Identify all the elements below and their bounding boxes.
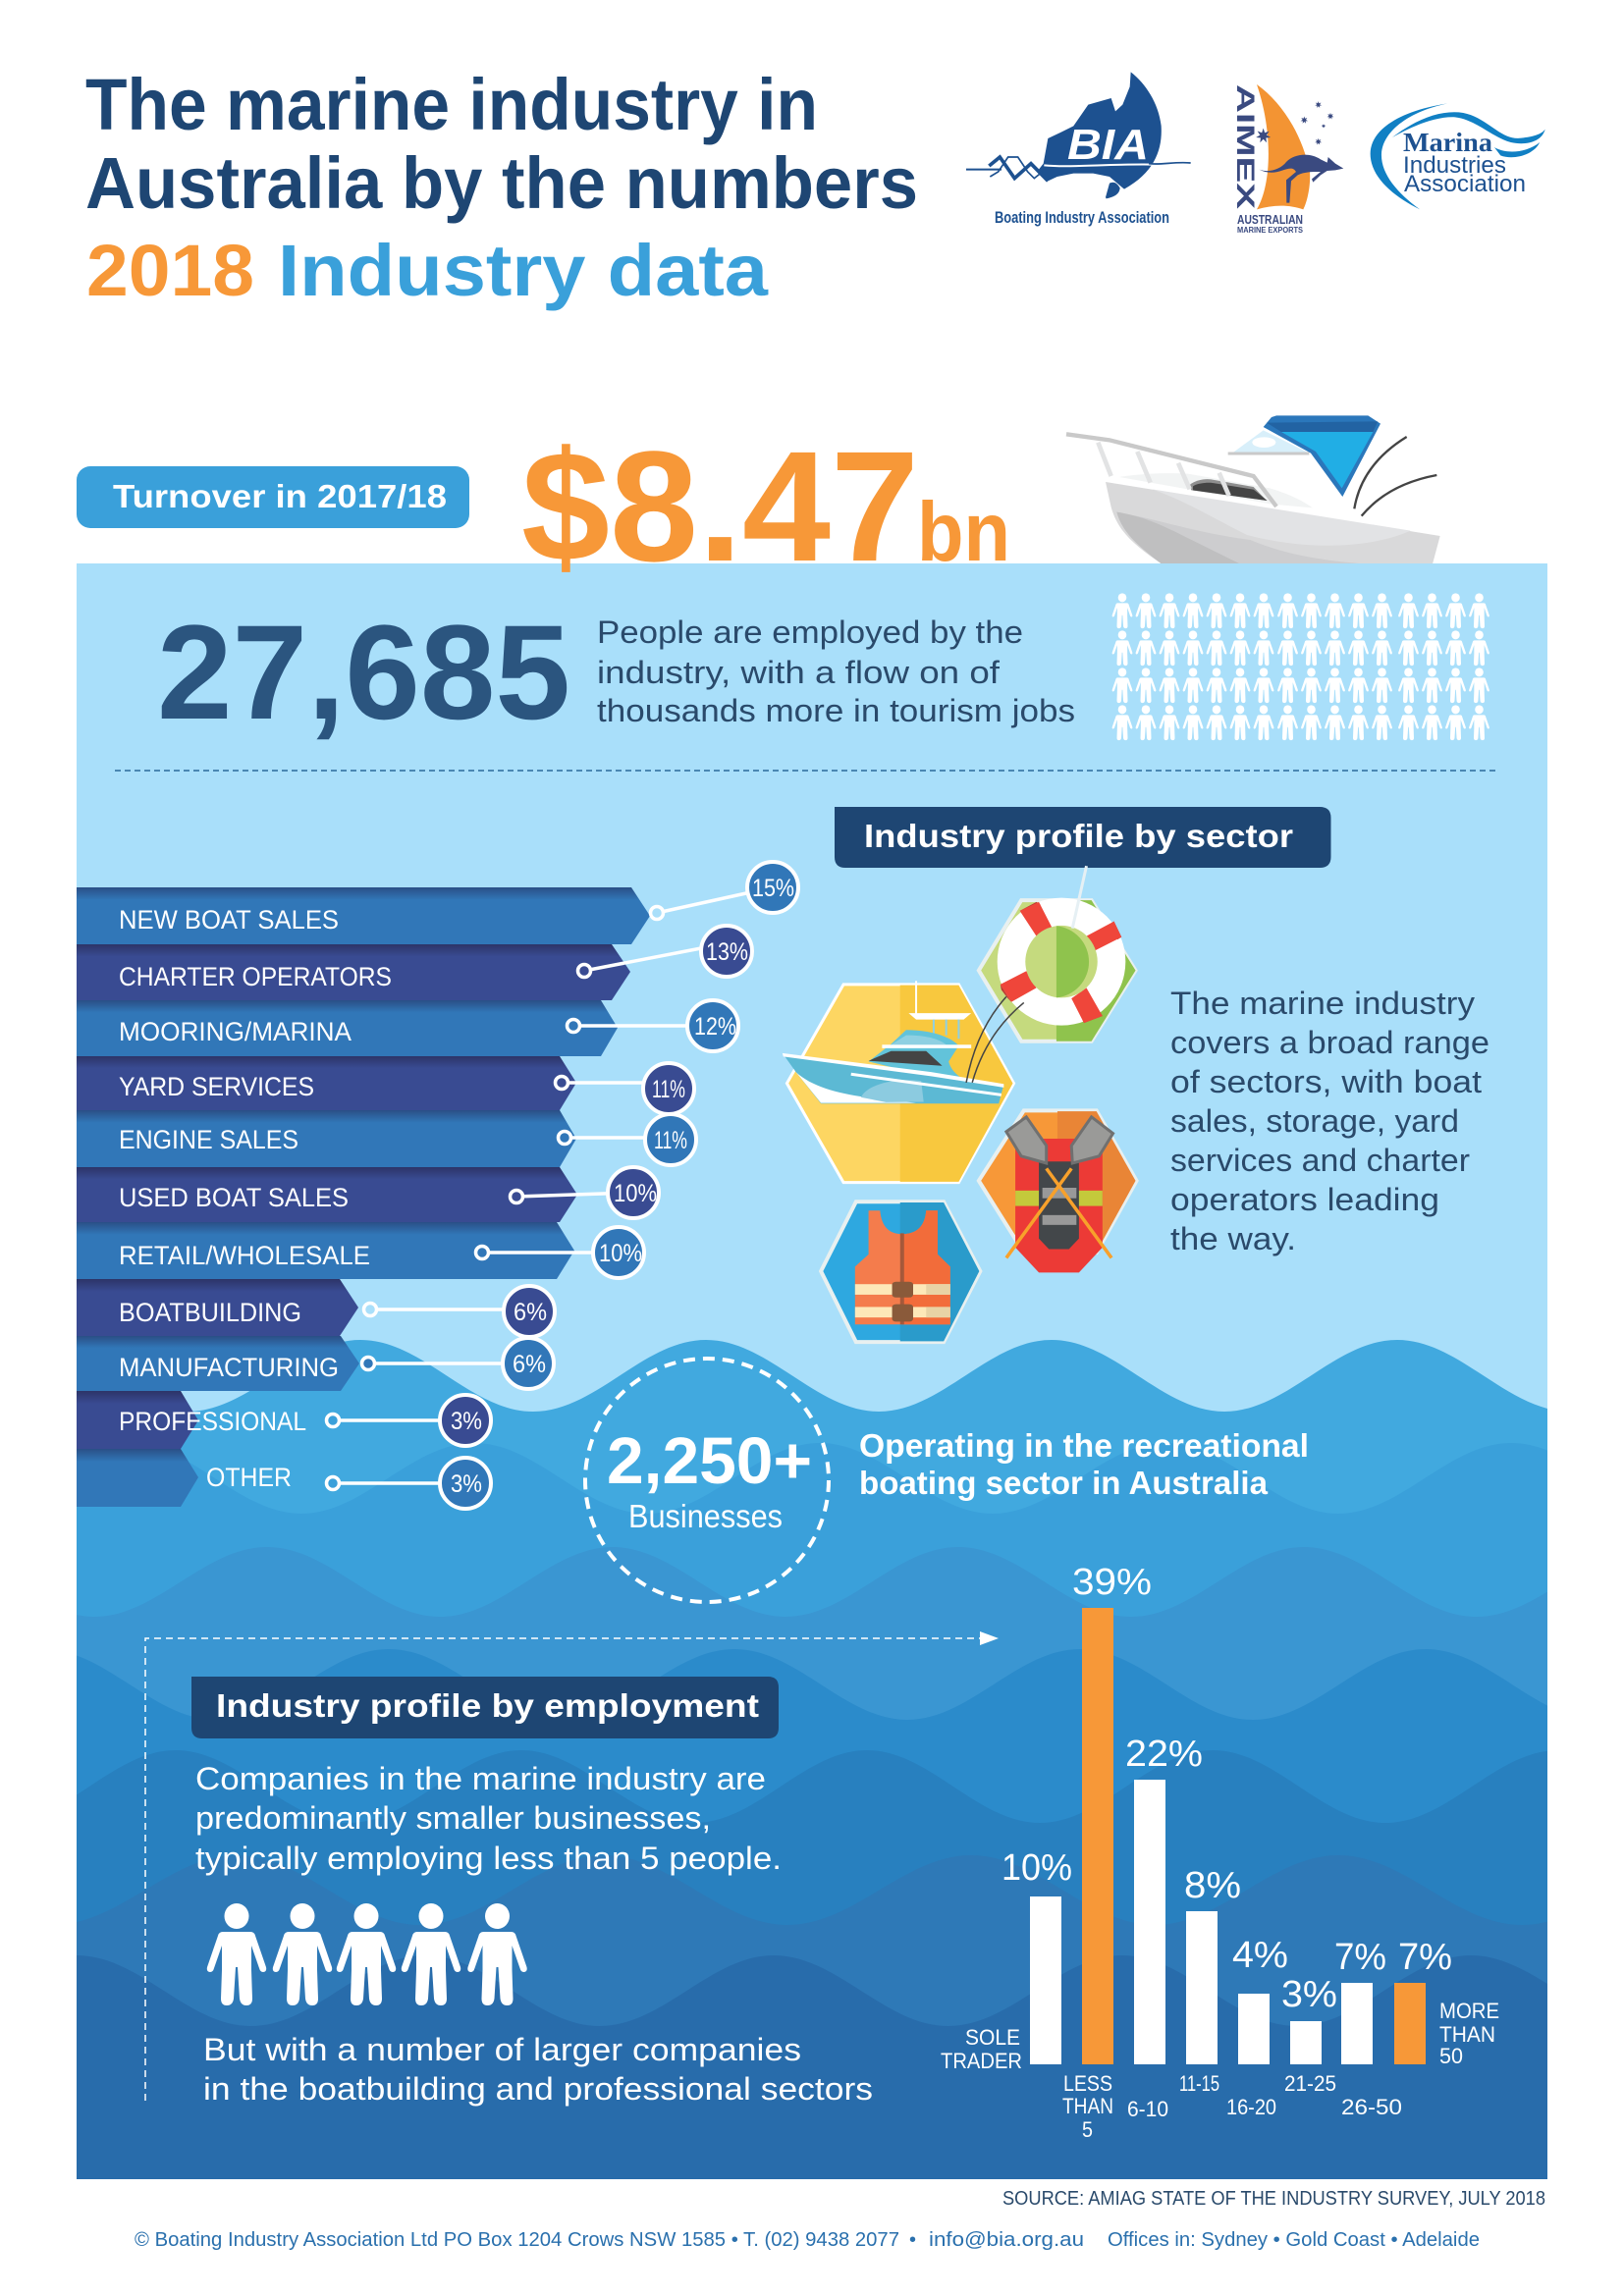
footer contact line: info@bia.org.au xyxy=(929,2229,1084,2251)
text: operating in the recreational boating sector xyxy=(859,1427,1309,1501)
bar chart: employment: 4% xyxy=(1232,1935,1288,1976)
title: Australia by the numbers xyxy=(85,142,918,224)
bar chart: employment: 50 xyxy=(1439,2044,1463,2068)
icon: life buoy hexagon xyxy=(979,866,1136,1041)
bar: used boat sales: USED BOAT SALES xyxy=(119,1183,349,1212)
logo: AIMEX xyxy=(1231,84,1343,235)
bar chart: employment: THAN xyxy=(1062,2094,1113,2118)
title xyxy=(85,64,918,311)
text: larger companies note: in the boatbuilding and professional sectors xyxy=(203,2071,873,2107)
chart: sector percentage badges: 10% xyxy=(614,1180,657,1207)
logo: AIMEX: AUSTRALIAN xyxy=(1237,212,1303,227)
bar: engine sales: ENGINE SALES xyxy=(119,1125,298,1154)
bar: charter operators: CHARTER OPERATORS xyxy=(119,962,392,991)
arrow: dashed flow to chart xyxy=(145,1631,999,2101)
chart: sector percentage badges: 3% xyxy=(451,1470,482,1498)
title: 2018 xyxy=(86,230,254,311)
bar chart: employment: 16-20 xyxy=(1226,2095,1276,2119)
logo: Boating Industry Association xyxy=(966,72,1191,227)
chart: sector percentage badges: 15% xyxy=(752,875,794,902)
logo: Marina Industries Association: Industries xyxy=(1403,152,1506,179)
chart: sector bars xyxy=(77,887,650,1507)
bar chart: employment: 39% xyxy=(1072,1562,1152,1603)
bar: other xyxy=(77,1449,292,1507)
bar chart: employment: 22% xyxy=(1125,1734,1203,1775)
bar chart: employment: 11-15 xyxy=(1179,2071,1219,2096)
bar: new boat sales: NEW BOAT SALES xyxy=(119,905,339,934)
logo: AIMEX: MARINE EXPORTS xyxy=(1237,226,1304,235)
heading: industry profile by employment: Industry profile by employment xyxy=(216,1687,759,1724)
bar chart: employment: LESS xyxy=(1063,2071,1112,2096)
text: sector description: operators leading xyxy=(1170,1182,1439,1217)
icon: boat hexagon xyxy=(783,981,1024,1183)
bar: retail/wholesale xyxy=(77,1222,574,1279)
bar chart: employment: 21-25 xyxy=(1284,2071,1336,2096)
turnover pill: Turnover in 2017/18 xyxy=(113,478,447,514)
employment text: People are employed by the xyxy=(597,614,1023,650)
chart: sector percentage badges: 3% xyxy=(451,1408,482,1435)
bar: boatbuilding xyxy=(77,1279,358,1336)
source note: SOURCE: AMIAG STATE OF THE INDUSTRY SURVEY, JULY 2018 xyxy=(1002,2188,1545,2210)
chart: sector percentage badges: 11% xyxy=(654,1127,687,1154)
chart: sector leader lines and dots xyxy=(326,887,773,1490)
turnover pill xyxy=(77,466,469,528)
icon: grid of people xyxy=(1112,593,1489,740)
turnover figure: bn xyxy=(917,486,1010,579)
turnover figure: $8.47 xyxy=(521,418,919,594)
text: sector description xyxy=(1170,986,1489,1256)
text: sector description: The marine industry xyxy=(1170,986,1475,1021)
text: sector description: services and charter xyxy=(1170,1143,1470,1178)
bar chart: employment: 8% xyxy=(1184,1865,1241,1906)
text: employment description xyxy=(195,1761,782,1876)
heading: industry profile by sector xyxy=(835,807,1331,868)
text: sector description: covers a broad range xyxy=(1170,1025,1489,1060)
logo: Marina Industries Association xyxy=(1371,103,1545,209)
bar chart: employment: 26-50 xyxy=(1341,2095,1402,2119)
footer contact line: Offices in: Sydney • Gold Coast • Adelaide xyxy=(1108,2229,1480,2251)
text: larger companies note xyxy=(203,2032,873,2107)
bar chart: employment: 3% xyxy=(1281,1974,1337,2015)
chart: sector percentage badges: 6% xyxy=(514,1299,547,1326)
footer contact line: © Boating Industry Association Ltd PO Box 1204 Crows NSW 1585 • T. (02) 9438 2077 xyxy=(135,2229,899,2251)
icon: life jacket hexagon xyxy=(821,1201,980,1342)
bar chart: employment: 7% xyxy=(1398,1937,1452,1978)
callout: businesses count xyxy=(585,1359,829,1602)
bar chart: employment: 5 xyxy=(1082,2117,1093,2142)
text: employment description: Companies in the marine industry are xyxy=(195,1761,766,1796)
bar: other: OTHER xyxy=(206,1463,292,1492)
bar chart: employment: 7% xyxy=(1334,1937,1386,1978)
text: larger companies note: But with a number of larger companies xyxy=(203,2032,801,2067)
text: sector description: the way. xyxy=(1170,1221,1296,1256)
callout: businesses count: Businesses xyxy=(628,1498,783,1534)
text: employment description: typically employing less than 5 people. xyxy=(195,1841,782,1876)
heading: industry profile by sector: Industry profile by sector xyxy=(864,818,1293,854)
chart: sector percentage badges: 11% xyxy=(652,1076,685,1103)
bar: mooring/marina xyxy=(77,1000,618,1056)
icon: raft hexagon xyxy=(979,1110,1137,1272)
footer contact line: • xyxy=(909,2229,916,2251)
icon: sector hexagons xyxy=(783,866,1137,1342)
chart: sector percentage badges xyxy=(440,862,798,1509)
logo: Boating Industry Association: BIA xyxy=(1067,121,1149,169)
bar: yard services: YARD SERVICES xyxy=(119,1072,314,1101)
bar chart: employment: 10% xyxy=(1001,1847,1072,1889)
bar chart: employment xyxy=(941,1562,1499,2142)
icon: boat xyxy=(1066,415,1440,564)
text: operating in the recreational boating sector: Operating in the recreational xyxy=(859,1427,1309,1464)
bar: professional xyxy=(77,1391,306,1449)
bar chart: employment: SOLE xyxy=(965,2025,1020,2050)
bar: charter operators xyxy=(77,944,630,1000)
bar chart: employment: MORE xyxy=(1439,1999,1499,2023)
text: employment description: predominantly smaller businesses, xyxy=(195,1800,711,1836)
chart: sector percentage badges: 12% xyxy=(694,1013,736,1041)
footer contact line xyxy=(135,2229,1480,2251)
employment figure: 27,685 xyxy=(157,598,570,748)
title: The marine industry in xyxy=(85,64,818,145)
bar: engine sales xyxy=(77,1110,576,1167)
chart: sector percentage badges: 6% xyxy=(513,1351,546,1378)
bar chart: employment: 6-10 xyxy=(1127,2097,1168,2121)
callout: businesses count: 2,250+ xyxy=(607,1424,812,1498)
bar: professional: PROFESSIONAL xyxy=(119,1407,306,1436)
bar: used boat sales xyxy=(77,1167,577,1222)
bar: retail/wholesale: RETAIL/WHOLESALE xyxy=(119,1241,370,1270)
heading: industry profile by employment xyxy=(191,1677,779,1738)
logo: Marina Industries Association: Association xyxy=(1404,171,1526,197)
text: sector description: of sectors, with boat xyxy=(1170,1064,1482,1099)
bar: new boat sales xyxy=(77,887,650,944)
icon: five people xyxy=(207,1903,527,2005)
logo: Boating Industry Association: Boating Industry Association xyxy=(995,208,1169,227)
chart: sector percentage badges: 13% xyxy=(706,938,748,966)
logo: Marina Industries Association: Marina xyxy=(1403,128,1493,157)
employment text xyxy=(597,614,1075,728)
bar: mooring/marina: MOORING/MARINA xyxy=(119,1017,352,1046)
panel: main background with waves xyxy=(0,563,1624,2179)
title: Industry data xyxy=(278,230,769,311)
employment text: industry, with a flow on of xyxy=(597,655,1000,690)
chart: sector percentage badges: 10% xyxy=(599,1240,642,1267)
employment text: thousands more in tourism jobs xyxy=(597,693,1075,728)
text: sector description: sales, storage, yard xyxy=(1170,1103,1459,1139)
text: operating in the recreational boating sector: boating sector in Australia xyxy=(859,1465,1269,1501)
bar chart: employment: THAN xyxy=(1439,2022,1495,2047)
bar: manufacturing xyxy=(77,1336,359,1391)
bar: boatbuilding: BOATBUILDING xyxy=(119,1298,301,1327)
bar chart: employment: TRADER xyxy=(941,2049,1022,2073)
bar: manufacturing: MANUFACTURING xyxy=(119,1353,339,1382)
bar: yard services xyxy=(77,1056,576,1110)
logo: AIMEX: AIMEX xyxy=(1231,84,1259,210)
